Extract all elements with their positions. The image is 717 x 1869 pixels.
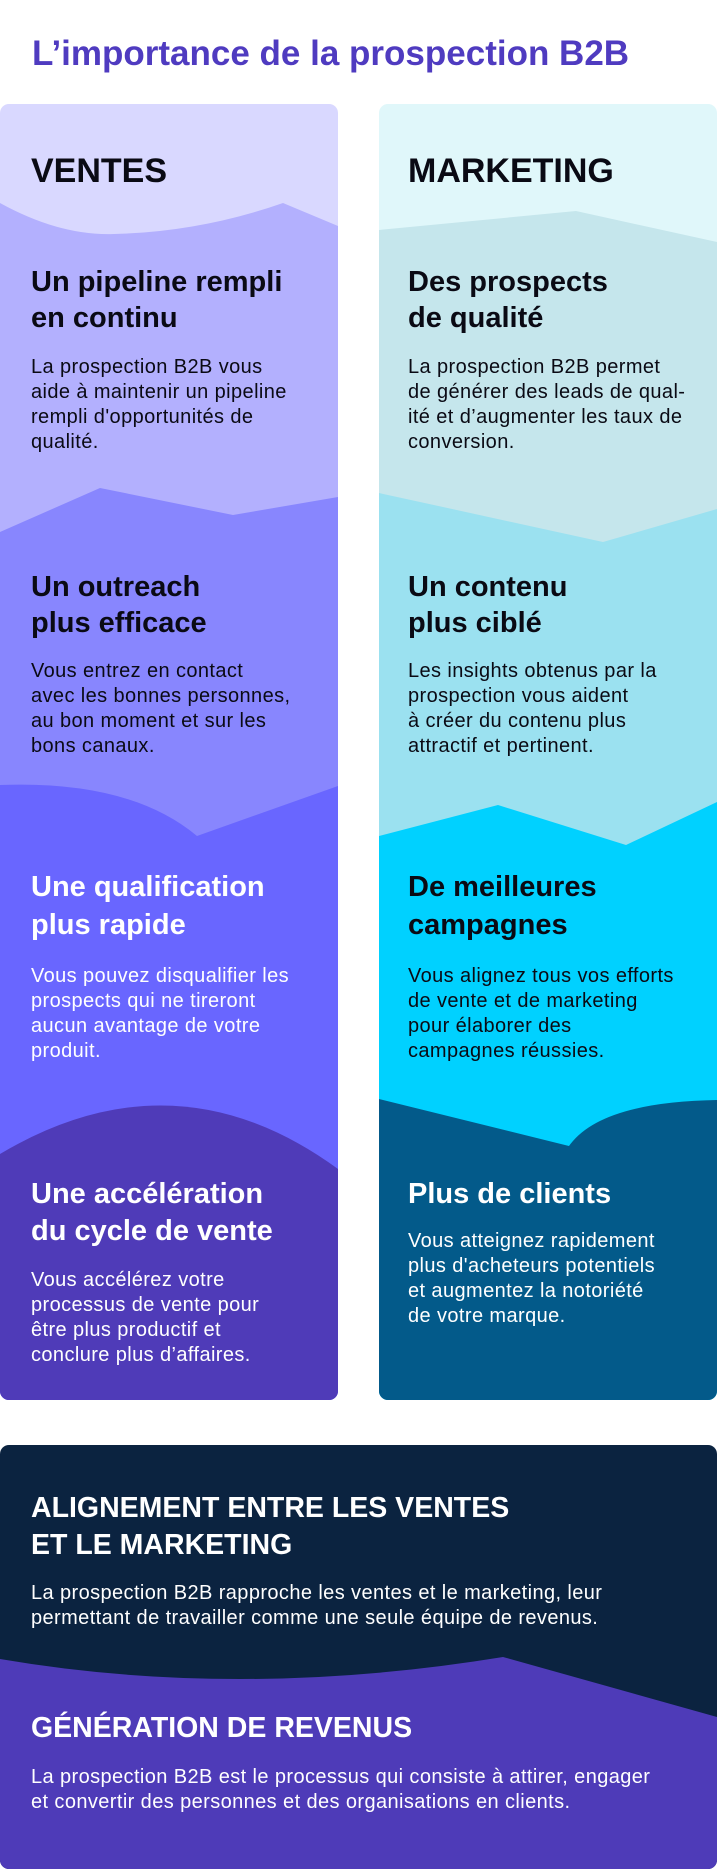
- item: contenu: Les insights obtenus par la: [408, 660, 657, 682]
- item: acceleration: [31, 1178, 273, 1366]
- item: prospects: ité et d’augmenter les taux de: [408, 406, 682, 428]
- item: pipeline: [31, 266, 287, 453]
- item: prospects: de générer des leads de qual-: [408, 381, 685, 403]
- panel: ventes: [0, 104, 338, 1400]
- block: alignement: ET LE MARKETING: [31, 1529, 292, 1561]
- heading: marketing: MARKETING: [408, 152, 614, 190]
- panel: bottom: [0, 1445, 717, 1869]
- item: qualification: Une qualification: [31, 871, 265, 903]
- item: clients: plus d'acheteurs potentiels: [408, 1255, 655, 1277]
- item: prospects: de qualité: [408, 302, 543, 334]
- item: outreach: Vous entrez en contact: [31, 660, 243, 682]
- item: qualification: prospects qui ne tireront: [31, 990, 256, 1012]
- item: campagnes: pour élaborer des: [408, 1015, 572, 1037]
- item: clients: de votre marque.: [408, 1305, 566, 1327]
- item: acceleration: Une accélération: [31, 1178, 263, 1210]
- item: prospects: La prospection B2B permet: [408, 356, 660, 378]
- block: generation: et convertir des personnes et des organisations en clients.: [31, 1791, 570, 1813]
- item: outreach: [31, 571, 290, 757]
- item: acceleration: du cycle de vente: [31, 1215, 273, 1247]
- item: campagnes: [408, 871, 674, 1062]
- item: outreach: bons canaux.: [31, 735, 155, 757]
- item: clients: [408, 1178, 655, 1327]
- block: alignement: ALIGNEMENT ENTRE LES VENTES: [31, 1492, 509, 1524]
- item: pipeline: Un pipeline rempli: [31, 266, 282, 298]
- item: prospects: Des prospects: [408, 266, 608, 298]
- item: pipeline: qualité.: [31, 431, 99, 453]
- item: clients: Plus de clients: [408, 1178, 611, 1210]
- item: pipeline: rempli d'opportunités de: [31, 406, 253, 428]
- item: outreach: plus efficace: [31, 607, 207, 639]
- item: acceleration: Vous accélérez votre: [31, 1269, 225, 1291]
- item: pipeline: en continu: [31, 302, 178, 334]
- title: L’importance de la prospection B2B: [32, 34, 629, 73]
- item: clients: et augmentez la notoriété: [408, 1280, 644, 1302]
- panel: marketing: [379, 104, 717, 1400]
- item: campagnes: campagnes: [408, 909, 568, 941]
- item: acceleration: conclure plus d’affaires.: [31, 1344, 251, 1366]
- item: pipeline: aide à maintenir un pipeline: [31, 381, 287, 403]
- item: campagnes: Vous alignez tous vos efforts: [408, 965, 674, 987]
- item: qualification: aucun avantage de votre: [31, 1015, 260, 1037]
- item: campagnes: de vente et de marketing: [408, 990, 638, 1012]
- block: generation: La prospection B2B est le processus qui consiste à attirer, engager: [31, 1766, 650, 1788]
- item: contenu: attractif et pertinent.: [408, 735, 594, 757]
- item: clients: Vous atteignez rapidement: [408, 1230, 655, 1252]
- item: qualification: produit.: [31, 1040, 101, 1062]
- item: pipeline: La prospection B2B vous: [31, 356, 263, 378]
- item: contenu: plus ciblé: [408, 607, 542, 639]
- item: qualification: plus rapide: [31, 909, 186, 941]
- item: prospects: [408, 266, 685, 453]
- block: alignement: permettant de travailler comme une seule équipe de revenus.: [31, 1607, 598, 1629]
- item: contenu: [408, 571, 657, 757]
- block: generation: [31, 1712, 650, 1813]
- item: acceleration: processus de vente pour: [31, 1294, 259, 1316]
- item: contenu: prospection vous aident: [408, 685, 628, 707]
- heading: ventes: VENTES: [31, 152, 167, 190]
- item: campagnes: De meilleures: [408, 871, 597, 903]
- block: alignement: [31, 1492, 602, 1629]
- item: qualification: [31, 871, 289, 1062]
- item: contenu: Un contenu: [408, 571, 568, 603]
- item: outreach: au bon moment et sur les: [31, 710, 266, 732]
- item: contenu: à créer du contenu plus: [408, 710, 626, 732]
- item: campagnes: campagnes réussies.: [408, 1040, 605, 1062]
- item: outreach: avec les bonnes personnes,: [31, 685, 290, 707]
- item: acceleration: être plus productif et: [31, 1319, 221, 1341]
- item: outreach: Un outreach: [31, 571, 200, 603]
- item: prospects: conversion.: [408, 431, 515, 453]
- block: generation: GÉNÉRATION DE REVENUS: [31, 1712, 412, 1744]
- item: qualification: Vous pouvez disqualifier les: [31, 965, 289, 987]
- block: alignement: La prospection B2B rapproche les ventes et le marketing, leur: [31, 1582, 602, 1604]
